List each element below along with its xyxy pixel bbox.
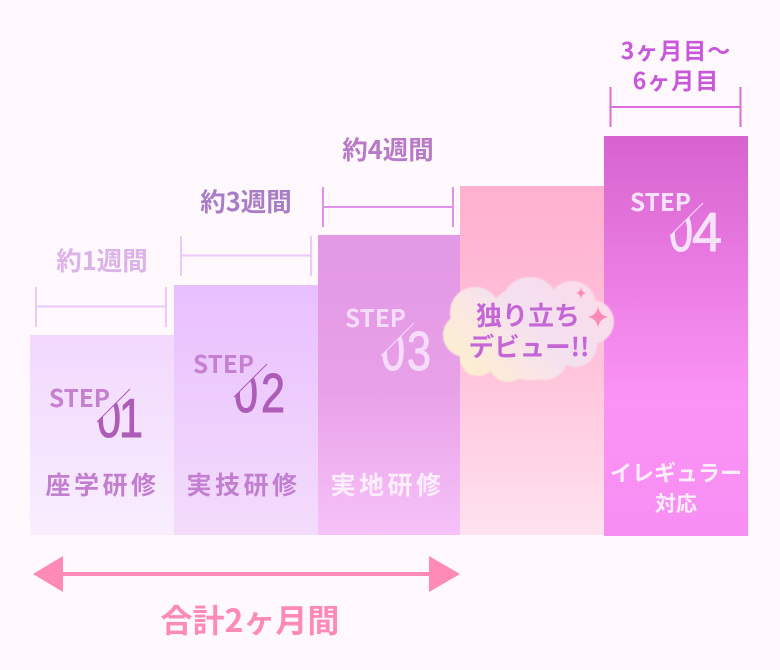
duration bracket: step 3 (323, 187, 453, 227)
step 3 badge: 3 (407, 320, 431, 382)
callout text: 独り立ち (476, 296, 580, 333)
duration label: step 4 (621, 32, 731, 96)
duration bracket: step 4 (610, 87, 740, 127)
step 3 badge: STEP (345, 299, 406, 334)
panel: step 1 bar (30, 335, 174, 535)
step 4 label: イレギュラー (610, 456, 742, 488)
step 2 label: 実技研修 (186, 466, 301, 502)
step 1 badge (50, 388, 142, 438)
panel: step 2 bar (174, 285, 318, 535)
step 2 badge: 2 (261, 362, 285, 424)
step 2 badge (194, 354, 284, 413)
icon: sparkles (576, 287, 608, 328)
duration bracket: step 2 (181, 236, 311, 276)
step 2 badge: STEP (193, 345, 254, 380)
callout: debut cloud (443, 277, 614, 382)
step 1 label: 座学研修 (45, 466, 160, 502)
step 4 label: 対応 (655, 488, 697, 518)
step 4 badge: 4 (692, 201, 722, 263)
panel: step 4 bar (604, 136, 748, 536)
duration label: step 1: 約1週間 (56, 241, 148, 278)
arrow: total span (33, 556, 460, 592)
step 3 badge: 0 (381, 320, 405, 382)
step 3 label: 実地研修 (330, 466, 445, 502)
step 4 badge: STEP (630, 183, 691, 218)
step 1 badge: STEP (49, 379, 110, 414)
step 4 badge (631, 192, 721, 252)
step 3 badge (346, 308, 430, 371)
duration label: step 4: 6ヶ月目 (633, 62, 719, 96)
step 4 label (610, 456, 742, 518)
panel: debut bar (460, 186, 604, 535)
duration label: step 2: 約3週間 (200, 182, 292, 219)
callout: debut cloud: デビュー!! (469, 327, 589, 364)
step 2 badge: 0 (234, 362, 258, 424)
duration bracket: step 1 (36, 287, 166, 327)
step 1 badge: 1 (119, 387, 143, 449)
total duration label: 合計2ヶ月間 (161, 596, 339, 642)
duration label: step 4: 3ヶ月目〜 (621, 32, 731, 66)
step 1 badge: 0 (97, 387, 121, 449)
panel: step 3 bar (318, 235, 460, 535)
duration label: step 3: 約4週間 (342, 130, 434, 167)
step 4 badge: 0 (669, 201, 693, 263)
